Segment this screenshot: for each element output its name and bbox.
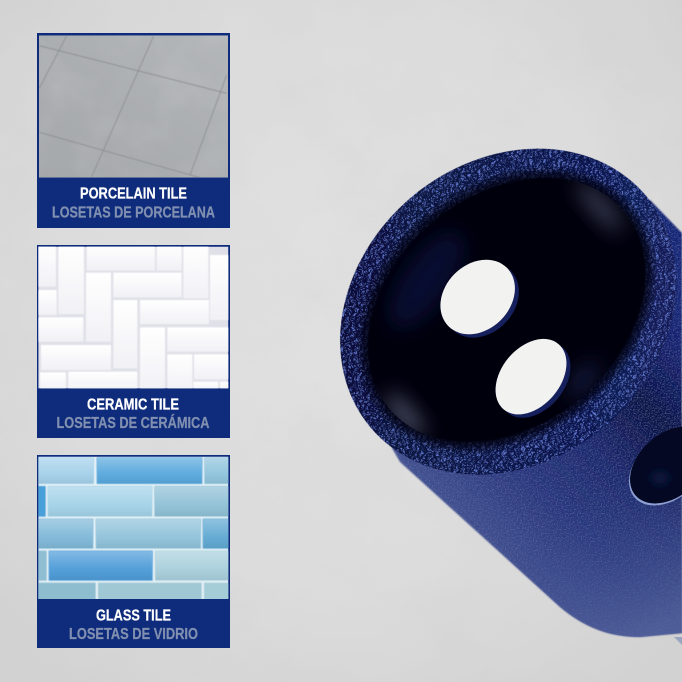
panel: porcelain tile: [37, 33, 230, 228]
label: LOSETAS DE CERÁMICA: [56, 413, 210, 432]
rim inner shadow: [356, 166, 657, 454]
label: PORCELAIN TILE: [80, 186, 187, 202]
panel: glass tile: [35, 455, 232, 648]
body tip reflection: [674, 637, 682, 645]
porcelain tile photo: [39, 35, 228, 178]
label: [69, 608, 198, 643]
glass tile photo: [35, 457, 232, 602]
ceramic tile photo: [35, 243, 232, 392]
panel: ceramic tile: [35, 243, 232, 438]
diamond grit rim and interior: [340, 148, 677, 475]
label: CERAMIC TILE: [87, 396, 179, 414]
abrasive rim: [274, 81, 682, 542]
dark interior: [367, 177, 646, 443]
label: LOSETAS DE VIDRIO: [69, 626, 198, 643]
lower through-hole: [481, 325, 585, 432]
drill bit cylinder body: [392, 200, 682, 645]
upper through-hole: [425, 245, 534, 353]
label: LOSETAS DE PORCELANA: [52, 204, 215, 222]
drill bit product photo: [340, 148, 682, 645]
label: GLASS TILE: [96, 608, 171, 624]
side hole: [614, 411, 682, 521]
label: [52, 186, 215, 222]
label: [56, 396, 210, 432]
